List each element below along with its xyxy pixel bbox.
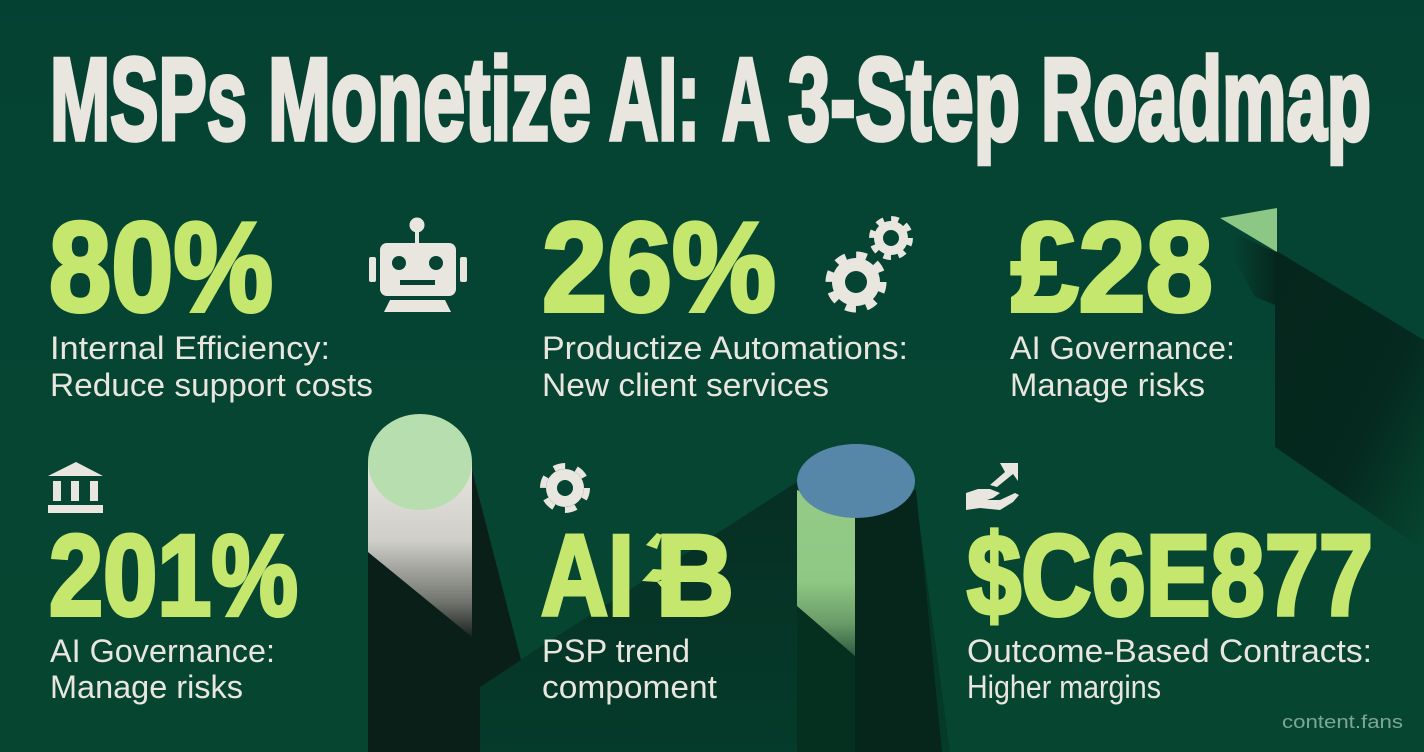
icon: institution building <box>48 462 103 513</box>
stat: AI B PSP trend: AI <box>541 512 634 640</box>
stat: $C6E877 outcome-based contracts: Outcome-Based Contracts: <box>967 633 1372 669</box>
stat: 26% productize automations: Productize Automations: <box>542 330 908 366</box>
stat: 80% internal efficiency: Reduce support costs <box>50 367 373 403</box>
title: A <box>722 34 770 164</box>
title: AI: <box>609 34 700 164</box>
shape: left cylinder <box>368 414 521 752</box>
stat: 201% AI governance: AI Governance: <box>50 633 275 669</box>
icon: gear <box>543 466 587 510</box>
watermark: content.fans <box>1282 711 1403 732</box>
stat: $C6E877 outcome-based contracts: Higher margins <box>967 669 1161 705</box>
stat: AI B PSP trend: PSP trend <box>542 633 690 669</box>
stat: £28 AI governance: £28 <box>1011 196 1213 338</box>
stat: AI B PSP trend: B <box>656 512 734 640</box>
shape: long shadow behind centre <box>478 482 950 752</box>
title: Monetize <box>268 34 591 164</box>
icon: two gears <box>829 219 910 309</box>
stat: 201% AI governance: 201% <box>49 512 298 640</box>
stat: 80% internal efficiency: Internal Efficiency: <box>50 330 330 366</box>
stat: 26% productize automations: 26% <box>542 196 776 338</box>
stat: £28 AI governance: AI Governance: <box>1010 330 1235 366</box>
title: MSPs <box>50 34 247 164</box>
stat: 201% AI governance: Manage risks <box>50 669 243 705</box>
stat: 80% internal efficiency <box>49 196 373 403</box>
shape: right cylinder <box>797 444 942 752</box>
stat: AI B PSP trend <box>541 512 734 705</box>
title <box>50 34 1371 164</box>
stat: 80% internal efficiency: 80% <box>49 196 273 338</box>
stat: £28 AI governance: Manage risks <box>1010 367 1205 403</box>
title: 3-Step <box>788 34 1020 164</box>
shape: top-right triangle with shadow <box>1220 208 1424 550</box>
stat: $C6E877 outcome-based contracts <box>967 512 1373 705</box>
stat: AI B PSP trend: compoment <box>542 669 717 705</box>
stat: 26% productize automations <box>542 196 908 403</box>
icon: hand with rising arrow <box>966 463 1019 510</box>
icon: robot <box>369 218 467 312</box>
stat: £28 AI governance <box>1010 196 1235 403</box>
stat: 26% productize automations: New client services <box>542 367 829 403</box>
stat: 201% AI governance <box>49 512 298 705</box>
